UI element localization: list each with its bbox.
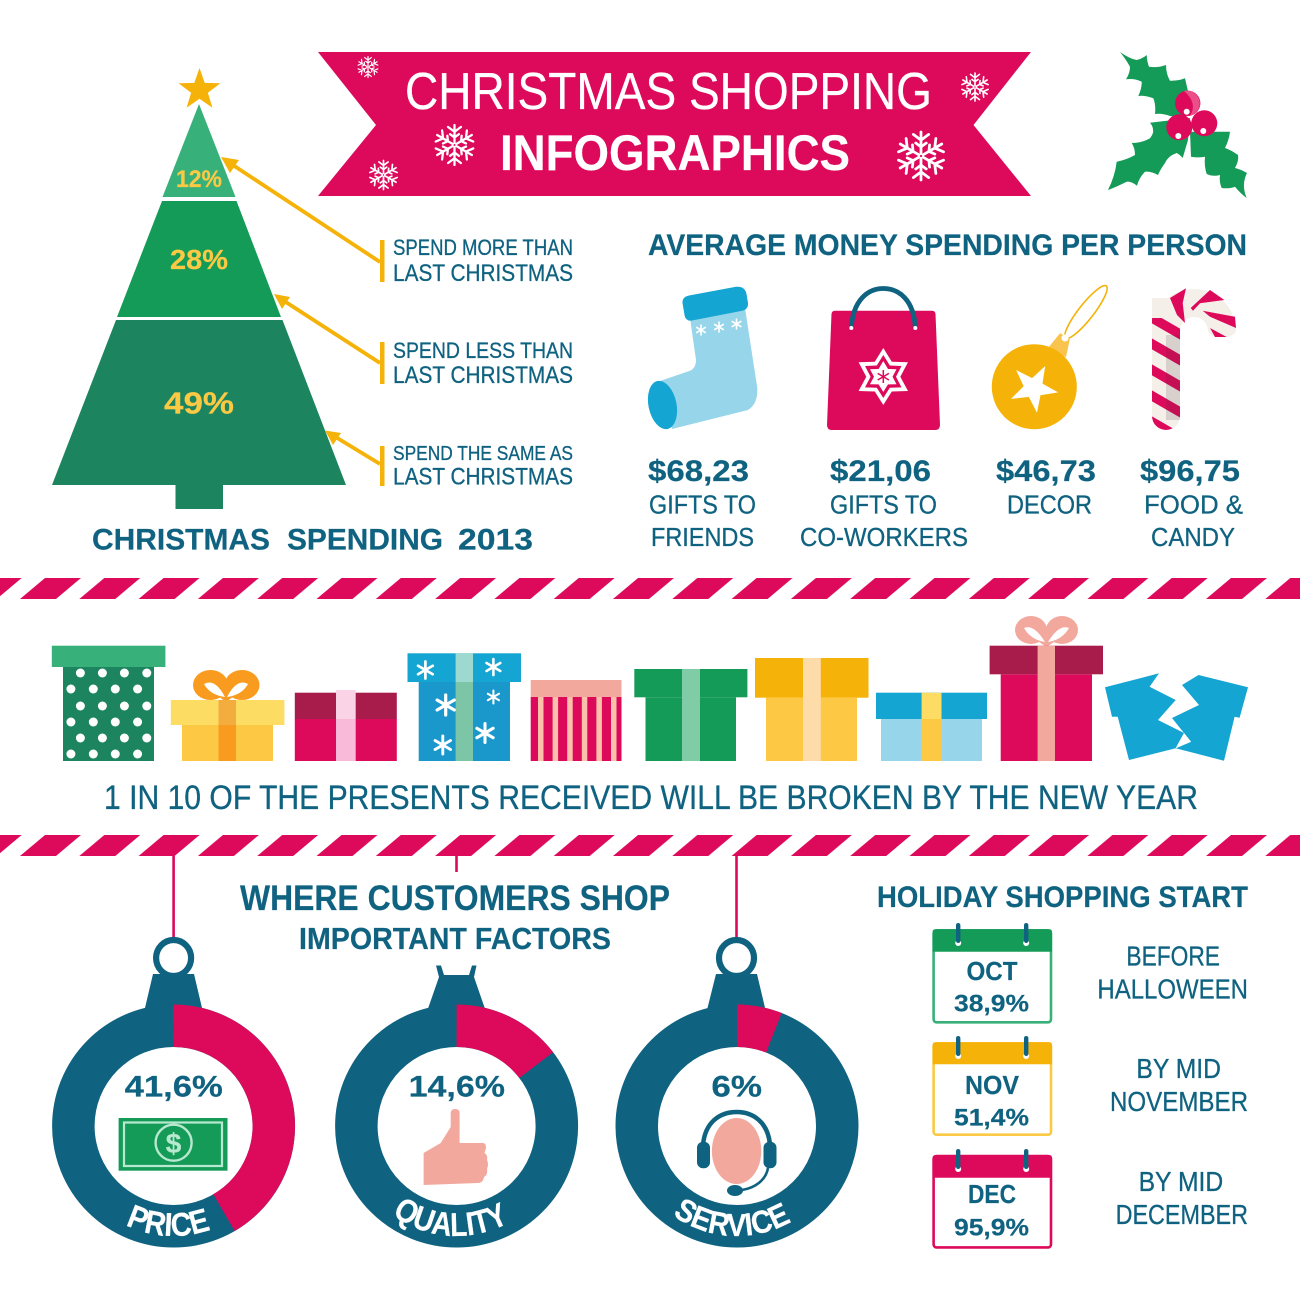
icon: headset agent <box>697 1112 776 1196</box>
label: spend less than: SPEND LESS THAN <box>393 338 573 363</box>
heading: where customers shop <box>240 879 670 956</box>
icon: banknote: $ <box>166 1128 182 1159</box>
icon: bauble <box>992 281 1112 429</box>
candy stripe divider top <box>0 578 1300 599</box>
gift 7: amber <box>755 658 868 761</box>
chart: christmas tree <box>52 104 346 509</box>
label: by mid december: DECEMBER <box>1116 1199 1248 1230</box>
stat: food and candy: FOOD & <box>1144 490 1243 520</box>
icon: thumbs up <box>424 1109 488 1185</box>
heading: where customers shop: IMPORTANT FACTORS <box>299 921 611 956</box>
icon: shopping bag <box>827 288 940 430</box>
label: spend more than <box>393 235 573 287</box>
ornament chart: service <box>616 856 858 1248</box>
label: service: SERVICE <box>675 1200 791 1236</box>
heading: christmas spending 2013: SPENDING <box>287 524 443 556</box>
arrow: spend more <box>221 157 384 282</box>
label: by mid november: NOVEMBER <box>1110 1086 1248 1117</box>
label: spend the same as <box>393 443 573 490</box>
gift 10: broken <box>1105 673 1248 761</box>
calendar: november: NOV <box>965 1070 1020 1100</box>
gift 5: striped <box>531 680 622 761</box>
gift 6: green <box>634 669 747 761</box>
label: spend more than: SPEND MORE THAN <box>393 235 573 260</box>
value: 49%: 49% <box>164 386 234 420</box>
ornament chart: price <box>52 856 296 1248</box>
label: before halloween <box>1097 940 1248 1004</box>
arrow: spend same <box>325 430 384 486</box>
heading: christmas spending 2013 <box>92 524 533 556</box>
label: spend more than: LAST CHRISTMAS <box>393 260 573 287</box>
title line 2: INFOGRAPHICS <box>500 125 850 181</box>
stat: decor: $46,73 <box>996 455 1096 488</box>
heading: christmas spending 2013: CHRISTMAS <box>92 524 270 556</box>
value: 14,6%: 14,6% <box>409 1070 505 1104</box>
icon: holly <box>1108 52 1247 198</box>
stat: gifts to friends: GIFTS TO <box>649 490 756 520</box>
icons: snowflakes <box>357 56 989 190</box>
stat: gifts to friends <box>648 455 756 552</box>
calendar: october: OCT <box>966 956 1018 986</box>
stat: food and candy: $96,75 <box>1140 455 1240 488</box>
icon: banknote <box>119 1118 228 1171</box>
stat: gifts to friends: FRIENDS <box>651 522 754 552</box>
value: 41,6%: 41,6% <box>125 1070 223 1104</box>
value: 6%: 6% <box>711 1070 762 1104</box>
title banner <box>318 52 1031 196</box>
gift 9: crimson with bow <box>990 616 1103 761</box>
value: 28%: 28% <box>170 244 228 275</box>
value: 12%: 12% <box>176 166 222 193</box>
stat: gifts to co-workers <box>800 455 968 552</box>
icon: stocking <box>644 287 757 432</box>
gift 2: yellow with bow <box>171 670 284 761</box>
calendar: october: 38,9% <box>954 990 1029 1018</box>
calendar: december <box>933 1149 1052 1247</box>
stat: food and candy: CANDY <box>1151 522 1235 552</box>
label: before halloween: HALLOWEEN <box>1097 974 1248 1004</box>
calendar: november <box>933 1036 1052 1135</box>
label: before halloween: BEFORE <box>1126 940 1220 972</box>
calendar: december: 95,9% <box>954 1214 1029 1242</box>
calendar: october <box>933 923 1052 1022</box>
heading: holiday shopping start: HOLIDAY SHOPPING START <box>877 881 1248 914</box>
stat: gifts to co-workers: $21,06 <box>830 455 931 488</box>
arrow: spend less <box>274 294 384 384</box>
stat: decor <box>996 455 1096 520</box>
calendar: december: DEC <box>968 1179 1016 1209</box>
heading: christmas spending 2013: 2013 <box>458 524 533 556</box>
label: spend less than <box>393 338 573 389</box>
stat: decor: DECOR <box>1007 490 1092 520</box>
label: spend less than: LAST CHRISTMAS <box>393 362 573 389</box>
heading: where customers shop: WHERE CUSTOMERS SHOP <box>240 879 670 918</box>
stat: gifts to co-workers: CO-WORKERS <box>800 522 968 552</box>
ornament chart: quality <box>335 856 578 1248</box>
label: spend the same as: SPEND THE SAME AS <box>393 443 573 465</box>
label: by mid december <box>1116 1166 1248 1230</box>
calendar: november: 51,4% <box>954 1104 1029 1132</box>
candy stripe divider bottom <box>0 835 1300 856</box>
heading: average money spending: AVERAGE MONEY SPENDING PER PERSON <box>648 229 1247 262</box>
label: by mid november: BY MID <box>1136 1053 1221 1084</box>
gift 3: crimson <box>295 690 397 761</box>
label: quality: QUALITY <box>396 1200 503 1236</box>
stat: gifts to friends: $68,23 <box>648 455 749 488</box>
icon: candy cane <box>1152 288 1236 420</box>
label: by mid december: BY MID <box>1139 1166 1223 1197</box>
title line 1: CHRISTMAS SHOPPING <box>405 63 932 121</box>
label: spend the same as: LAST CHRISTMAS <box>393 464 573 490</box>
label: by mid november <box>1110 1053 1248 1117</box>
stat: food and candy <box>1140 455 1243 552</box>
gift 4: blue with snow <box>408 653 521 761</box>
label: price: PRICE <box>126 1204 210 1236</box>
stat: gifts to co-workers: GIFTS TO <box>830 490 937 520</box>
icon: tree star <box>179 68 220 108</box>
gift 1: polka dots <box>52 646 165 761</box>
gift 8: light blue <box>876 693 987 761</box>
